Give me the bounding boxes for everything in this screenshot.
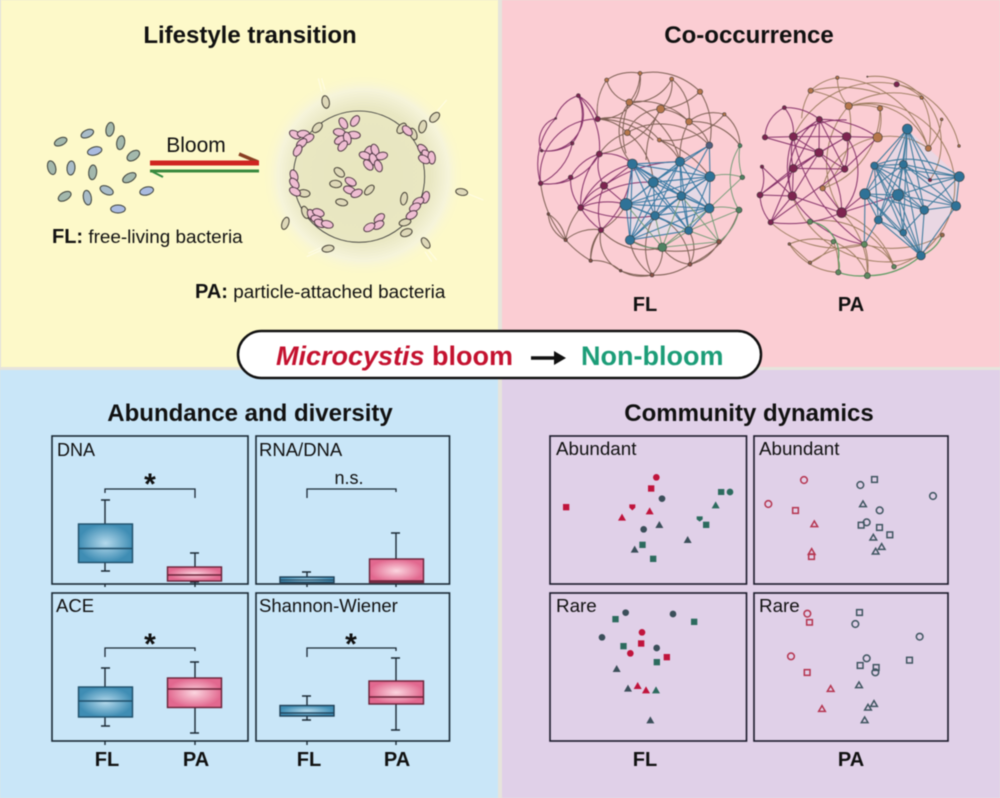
arrow: bloom forward xyxy=(150,154,259,163)
center banner: Non-bloom xyxy=(581,341,723,371)
boxplot: DNA xyxy=(52,436,248,587)
label: network FL: FL xyxy=(633,294,657,316)
axis labels: community: FL xyxy=(633,749,657,771)
axis labels: abundance: PA xyxy=(384,749,410,771)
scatter: PA rare: Rare xyxy=(759,595,800,616)
boxplot: RNA/DNA: n.s. xyxy=(334,468,364,488)
axis labels: community: PA xyxy=(838,749,864,771)
label: FL free-living bacteria: FL: free-living bacteria xyxy=(52,226,243,248)
title: lifestyle transition: Lifestyle transition xyxy=(143,22,357,49)
scatter: PA rare xyxy=(754,593,948,741)
center banner: bloom xyxy=(432,341,513,371)
title: community dynamics: Community dynamics xyxy=(624,400,874,427)
label: PA particle-attached bacteria: PA: particle-attached bacteria xyxy=(195,281,446,303)
boxplot: Shannon-Wiener xyxy=(256,593,450,745)
label: network PA: PA xyxy=(838,294,864,316)
title: abundance and diversity: Abundance and diversity xyxy=(107,400,393,427)
boxplot: ACE: ACE xyxy=(56,595,94,616)
title: co-occurrence: Co-occurrence xyxy=(664,22,834,49)
boxplot: DNA: * xyxy=(144,468,156,501)
panel: lifestyle transition xyxy=(1,0,498,367)
boxplot: Shannon-Wiener: Shannon-Wiener xyxy=(259,595,398,616)
particle with attached bacteria xyxy=(262,73,483,277)
panel: co-occurrence xyxy=(502,0,1000,367)
boxplot: DNA: DNA xyxy=(57,440,95,460)
scatter: PA abundant xyxy=(754,436,948,584)
boxplot: ACE xyxy=(52,593,248,745)
boxplot: ACE: * xyxy=(144,628,156,661)
arrow: reverse xyxy=(150,171,259,177)
center banner: Microcystis xyxy=(276,341,425,371)
scatter: FL abundant xyxy=(550,436,746,584)
boxplot: Shannon-Wiener: * xyxy=(345,628,357,661)
axis labels: community xyxy=(633,749,864,771)
axis labels: abundance: PA xyxy=(183,749,209,771)
boxplot: RNA/DNA xyxy=(256,436,450,587)
boxplot: RNA/DNA: RNA/DNA xyxy=(259,439,343,460)
center banner xyxy=(238,331,761,378)
network: FL xyxy=(538,71,745,277)
scatter: FL rare: Rare xyxy=(556,595,597,616)
axis labels: abundance xyxy=(95,749,410,771)
label: Bloom: Bloom xyxy=(166,134,226,157)
free-living bacteria cluster xyxy=(46,122,154,213)
scatter: FL abundant: Abundant xyxy=(556,438,637,459)
network: PA xyxy=(757,76,964,279)
axis labels: abundance: FL xyxy=(297,749,321,771)
scatter: PA abundant: Abundant xyxy=(759,438,840,459)
panel: community dynamics xyxy=(502,370,1000,798)
axis labels: abundance: FL xyxy=(95,749,119,771)
panel: abundance and diversity xyxy=(0,370,498,798)
scatter: FL rare xyxy=(550,593,746,741)
